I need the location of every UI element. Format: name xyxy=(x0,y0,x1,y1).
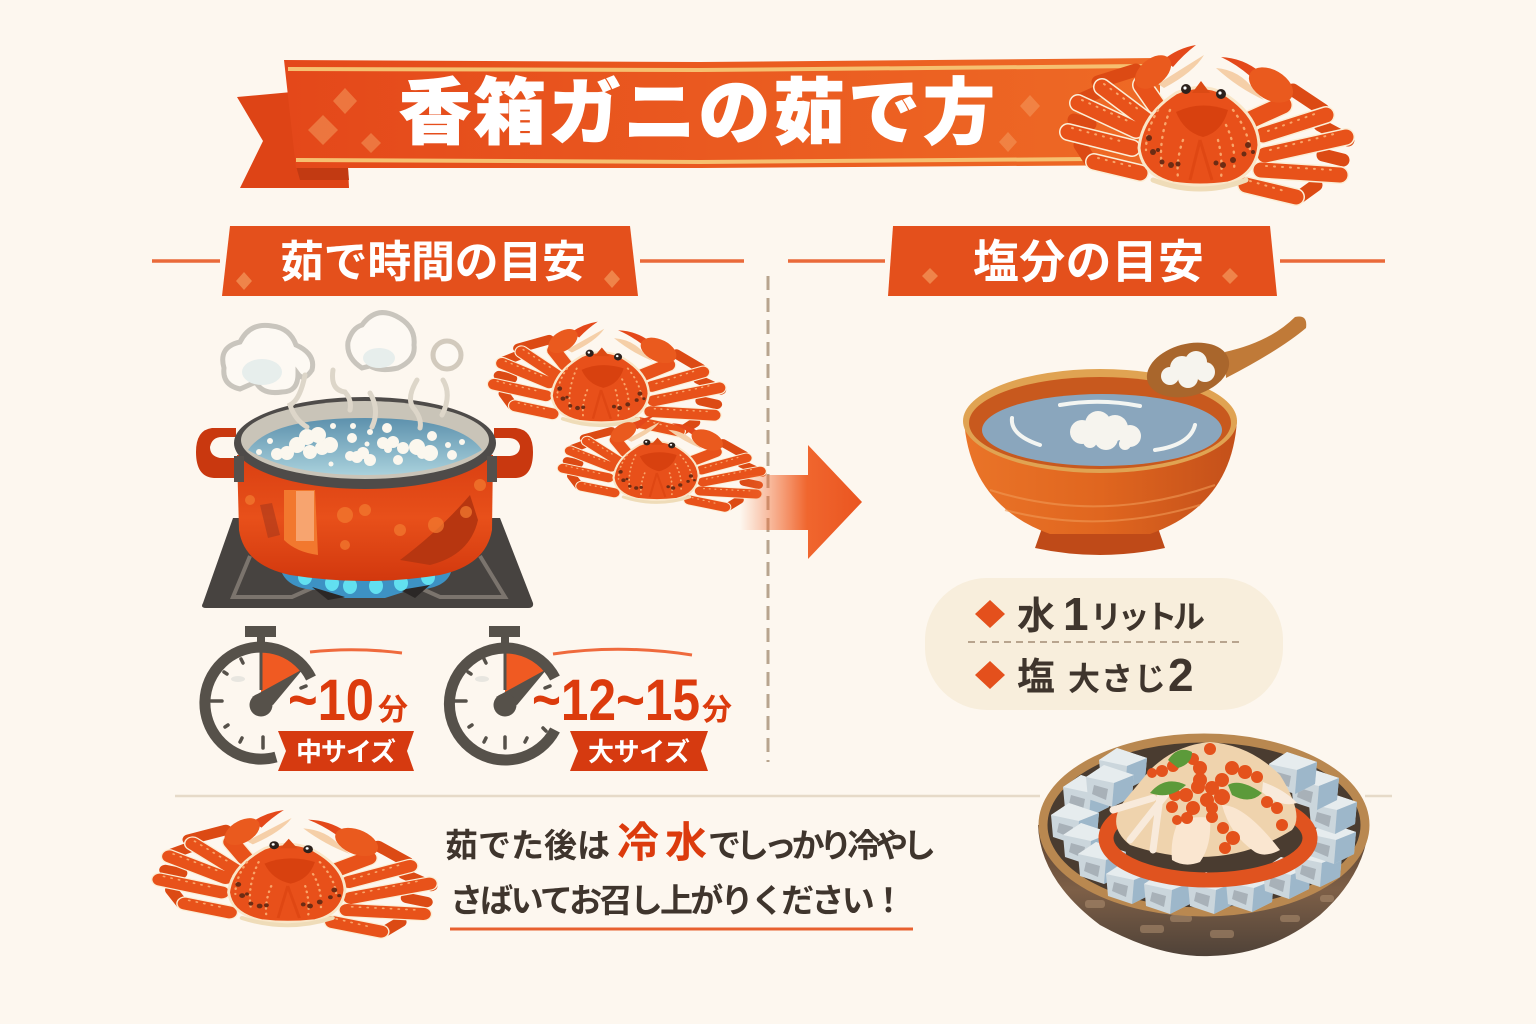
water xyxy=(982,394,1222,466)
spoon xyxy=(1225,316,1306,378)
ribbon tail xyxy=(237,92,349,188)
burner stove xyxy=(202,518,533,608)
bowl body xyxy=(964,420,1237,534)
foam xyxy=(256,423,465,466)
herb leaves xyxy=(1150,750,1262,800)
closing message xyxy=(445,819,936,929)
section heading: boiling time xyxy=(152,226,744,296)
line two: さばいてお召し上がりください！ xyxy=(450,882,905,919)
salt pile xyxy=(1070,411,1141,450)
closing message: でしっかり冷やし xyxy=(708,827,936,864)
line: water xyxy=(975,588,1205,640)
line: water: リットル xyxy=(1090,599,1205,635)
title banner xyxy=(237,58,1160,188)
boiling water xyxy=(248,418,482,475)
stopwatch: large size: 大サイズ xyxy=(588,737,690,767)
watch face xyxy=(245,626,276,644)
section heading: salt xyxy=(788,226,1385,296)
bowl body xyxy=(1038,825,1369,956)
steam wisps xyxy=(290,370,447,428)
closing message: 冷水 xyxy=(617,819,707,866)
steam clouds xyxy=(223,313,461,393)
stopwatch: large size: 分 xyxy=(702,694,732,727)
stopwatch: large size xyxy=(449,626,732,771)
pot rim xyxy=(234,397,496,489)
line: water: 水 xyxy=(1017,596,1055,638)
stopwatch: medium size: 分 xyxy=(378,694,408,727)
stopwatch: medium size xyxy=(205,626,414,771)
ice cubes xyxy=(1051,748,1357,914)
banner ornaments xyxy=(308,88,1040,153)
title text: 香箱ガニの茹で方 xyxy=(399,74,995,154)
icon: crab above pot xyxy=(494,322,721,432)
arrow xyxy=(740,445,862,559)
stopwatch: medium size: 中サイズ xyxy=(296,737,396,767)
cooking pot xyxy=(196,370,533,581)
line: salt xyxy=(975,649,1194,701)
section heading: salt: 塩分の目安 xyxy=(973,236,1204,288)
line: salt: 塩 xyxy=(1017,657,1055,699)
icon: crab beside pot xyxy=(563,416,762,508)
watch face xyxy=(489,626,520,644)
line one: 茹でた後は xyxy=(445,827,610,864)
rice and crab meat xyxy=(1113,742,1297,865)
bowl rim xyxy=(1043,738,1365,912)
time text: ~10 xyxy=(288,668,374,733)
size label xyxy=(278,731,414,771)
pot body xyxy=(237,455,493,581)
salmon roe xyxy=(1147,743,1288,854)
line: salt: 大さじ xyxy=(1068,661,1166,697)
icon: crab bottom left xyxy=(160,810,431,932)
crab rice bowl on ice xyxy=(1038,738,1369,956)
ingredient pill xyxy=(925,578,1283,710)
crab ring xyxy=(1106,796,1310,880)
section heading: boiling time: 茹で時間の目安 xyxy=(280,238,586,287)
time text: ~12~15 xyxy=(532,668,700,733)
bottom divider xyxy=(175,795,1392,797)
icon: crab in title xyxy=(1068,45,1348,198)
line: salt: 2 xyxy=(1168,649,1194,701)
vertical divider xyxy=(766,276,770,762)
salt water bowl xyxy=(963,316,1306,555)
pot handles xyxy=(196,428,236,478)
bowl foot xyxy=(1035,528,1165,555)
line: water: 1 xyxy=(1063,588,1089,640)
banner band xyxy=(284,58,1160,168)
size label xyxy=(570,731,708,771)
